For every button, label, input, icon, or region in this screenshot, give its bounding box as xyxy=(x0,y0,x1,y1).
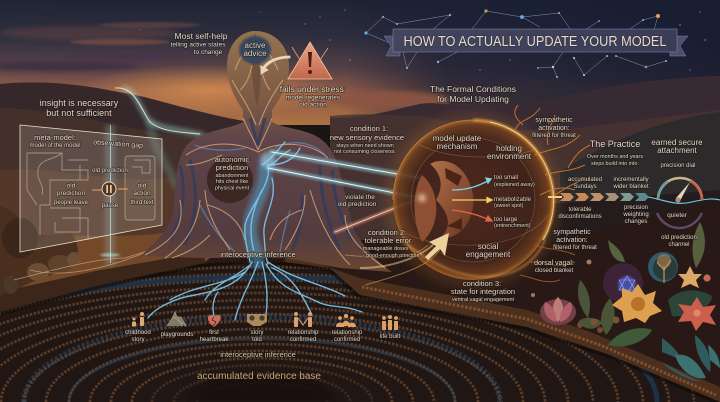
veins: blue interoceptive roots xyxy=(148,142,362,320)
label: social engagement: engagement xyxy=(466,250,511,259)
title banner xyxy=(384,29,688,56)
item: first heartbreak: first xyxy=(209,330,219,336)
label: sympathetic activation lower: filtered for threat xyxy=(553,245,597,251)
strata: upper right ledge with glyph band xyxy=(285,252,720,402)
title: HOW TO ACTUALLY UPDATE YOUR MODEL xyxy=(404,34,666,50)
label: social engagement: social xyxy=(478,242,498,251)
label: model update mechanism: mechanism xyxy=(437,142,478,151)
label: sympathetic activation lower: activation: xyxy=(556,237,588,244)
label: old action third text: third text xyxy=(130,200,154,206)
label: too large: (entrenchment) xyxy=(494,223,531,229)
item: first heartbreak: heartbreak xyxy=(200,337,229,343)
label: autonomic prediction: abandonment xyxy=(216,173,249,179)
update mechanism: copper dome xyxy=(414,161,473,242)
label: observation gap: observation gap xyxy=(93,139,143,150)
item: relationship confirmed group xyxy=(332,314,363,343)
item: story told: told xyxy=(252,337,262,343)
label: precision weighting changes: precision xyxy=(624,205,648,211)
label: condition 3: state for integration xyxy=(451,287,515,296)
item: life built: life built xyxy=(380,334,401,340)
constellation xyxy=(140,9,706,78)
label: holding environment: holding xyxy=(496,144,522,153)
label: fails under stress: fails under stress: xyxy=(280,84,346,94)
label: sympathetic activation lower: sympathetic xyxy=(553,229,591,236)
icon: orange flower xyxy=(612,284,662,323)
head brain patch: active advice xyxy=(239,36,271,64)
label: condition 3: condition 3: xyxy=(463,279,501,288)
label: interoceptive inference lower: interoceptive inference xyxy=(220,350,296,359)
label: accumulated sundays: accumulated xyxy=(568,177,602,183)
heading: formal conditions: for Model Updating xyxy=(437,94,509,104)
heading: accumulated evidence base: accumulated evidence base xyxy=(197,371,321,382)
label: condition 2: - good-enough principle xyxy=(363,253,419,259)
precision dial gauge xyxy=(657,178,702,228)
label: quieter: quieter xyxy=(667,212,688,219)
label: autonomic prediction: physical event xyxy=(215,186,250,192)
label: condition 2: tolerable error xyxy=(365,236,412,245)
arrow: tolerable error rising xyxy=(345,233,449,285)
glowing stream from mountain peak xyxy=(115,88,205,190)
item: relationship confirmed group: relationship xyxy=(332,330,363,336)
item: relationship confirmed xyxy=(288,312,319,343)
item: childhood story xyxy=(125,312,151,343)
label: earned secure attachment: attachment xyxy=(657,146,698,155)
item: childhood story: story xyxy=(131,337,145,343)
label: tolerable disconfirmations: disconfirmations xyxy=(558,214,602,220)
label: earned secure attachment: earned secure xyxy=(651,138,703,147)
heading: most self-help: to change xyxy=(194,49,223,56)
label: active advice: advice xyxy=(243,49,267,58)
icon: purple orb xyxy=(603,263,643,303)
leaf: broad green xyxy=(608,328,652,347)
heading: meta-model: meta-model: xyxy=(34,133,76,142)
sparkle below pane xyxy=(100,254,120,256)
label: old prediction people leave: prediction xyxy=(57,190,85,197)
diagram: neural map xyxy=(27,153,155,240)
label: violate the old prediction: violate the xyxy=(345,194,375,201)
label: old prediction: old prediction xyxy=(92,168,128,174)
label: too large: too large xyxy=(494,217,518,223)
label: condition 1: condition 1: xyxy=(350,124,388,133)
label: condition 2: condition 2: xyxy=(368,228,406,237)
chest heart glow xyxy=(260,152,276,168)
item: first heartbreak xyxy=(200,315,229,343)
label: fails under stress: model regenerates xyxy=(286,94,341,102)
label: sympathetic activation top: sympathetic xyxy=(535,117,573,124)
observation gap light beam xyxy=(105,125,115,265)
heading: formal conditions: The Formal Conditions xyxy=(430,84,516,94)
heading: the practice: The Practice xyxy=(590,139,640,149)
label: old action third text: old xyxy=(138,182,147,190)
label: old prediction channel: old prediction xyxy=(661,235,697,241)
label: pause: pause xyxy=(102,203,119,209)
item: story told: story xyxy=(250,330,264,336)
label: incrementally wider blanket: wider blanket xyxy=(612,184,649,190)
item: life built xyxy=(380,315,401,340)
heading: the practice: Over months and years xyxy=(587,154,643,160)
label: condition 1: not consuming closeness. xyxy=(334,149,396,155)
arrow: stress back to head xyxy=(261,56,290,74)
label: autonomic prediction: prediction xyxy=(216,163,248,172)
label: sympathetic activation top: filtered for threat xyxy=(532,133,576,139)
figure: human body xyxy=(140,31,392,272)
timeline of life events xyxy=(125,312,401,343)
label: sympathetic activation top: activation: xyxy=(538,125,570,132)
label: too small: too small xyxy=(494,175,518,181)
label: autonomic prediction: hits chest like xyxy=(216,179,248,185)
label: condition 1: new sensory evidence xyxy=(330,133,404,142)
chest void xyxy=(207,157,253,203)
flowers and botanical cluster xyxy=(531,222,720,382)
item: relationship confirmed: confirmed xyxy=(290,337,316,343)
icon: warning triangle xyxy=(288,42,332,79)
label: precision weighting changes: changes xyxy=(625,219,647,225)
background: dusk sky xyxy=(0,0,720,125)
label: condition 2: - manageable doses xyxy=(360,246,409,252)
label: old action third text: action xyxy=(133,190,151,197)
label: precision weighting changes: weighting xyxy=(622,212,649,218)
label: active advice: active xyxy=(245,41,266,50)
heading: insight: insight is necessary xyxy=(40,98,119,108)
item: relationship confirmed group: confirmed xyxy=(334,337,360,343)
label: fails under stress: old action xyxy=(299,102,327,108)
label: tolerable disconfirmations: tolerable xyxy=(568,207,592,213)
icon: coral star flower xyxy=(678,297,716,331)
heading: most self-help: telling active states xyxy=(171,42,226,48)
label: old prediction people leave: people leave xyxy=(54,200,89,206)
heading: insight: but not sufficient xyxy=(46,108,112,118)
label: old prediction channel: channel xyxy=(668,242,690,248)
label: incrementally wider blanket: incrementally xyxy=(613,177,649,183)
label: metabolizable: (sweet spot) xyxy=(494,203,524,209)
item: childhood story: childhood xyxy=(125,330,151,336)
beams: evidence into update mechanism xyxy=(268,152,420,232)
arrows: chevron stream and teal line xyxy=(548,193,720,203)
heading: most self-help: Most self-help xyxy=(175,31,228,41)
label: model update mechanism: model update xyxy=(433,134,482,143)
label: condition 1: stays when need shown xyxy=(336,143,394,149)
label: condition 3: ventral vagal engagement xyxy=(452,297,515,303)
item: playgrounds xyxy=(161,312,193,338)
heading: the practice: steps build into into: xyxy=(591,161,639,167)
label: old prediction people leave: old xyxy=(67,182,76,190)
connector arrows around pause xyxy=(92,189,128,190)
sparks: sympathetic activation filaments xyxy=(515,105,590,282)
label: metabolizable: metabolizable xyxy=(494,197,532,203)
label: autonomic prediction: autonomic xyxy=(215,155,250,164)
icon: teal tree orb xyxy=(648,252,678,283)
item: relationship confirmed: relationship xyxy=(288,330,319,336)
label: too small: (explained away) xyxy=(494,182,535,188)
panel: meta-model glass pane xyxy=(20,125,162,265)
item: playgrounds: playgrounds xyxy=(161,332,193,338)
label: holding environment: environment xyxy=(487,152,532,161)
leaves xyxy=(578,240,625,335)
label: accumulated sundays: Sundays xyxy=(573,184,597,190)
arrows: error size outcomes xyxy=(452,178,492,221)
icon: small orange flower xyxy=(678,266,702,288)
holding environment sphere xyxy=(391,118,555,282)
label: dorsal vagal: closed blanket xyxy=(535,268,574,274)
label: precision dial: precision dial xyxy=(660,163,696,169)
ground: dark earth behind the sphere and flowers xyxy=(0,200,720,402)
label: interoceptive inference upper: interoceptive inference xyxy=(220,250,296,259)
icon: pink lotus xyxy=(540,297,576,325)
icon: pause button xyxy=(102,182,116,196)
label: violate the old prediction: old prediction xyxy=(338,201,377,208)
heading: meta-model: model of the model xyxy=(29,143,81,149)
item: story told xyxy=(247,314,267,343)
left foreground ground and rocks xyxy=(0,205,225,314)
strata: accumulated evidence layers xyxy=(0,258,720,402)
label: dorsal vagal: dorsal vagal: xyxy=(534,260,574,267)
